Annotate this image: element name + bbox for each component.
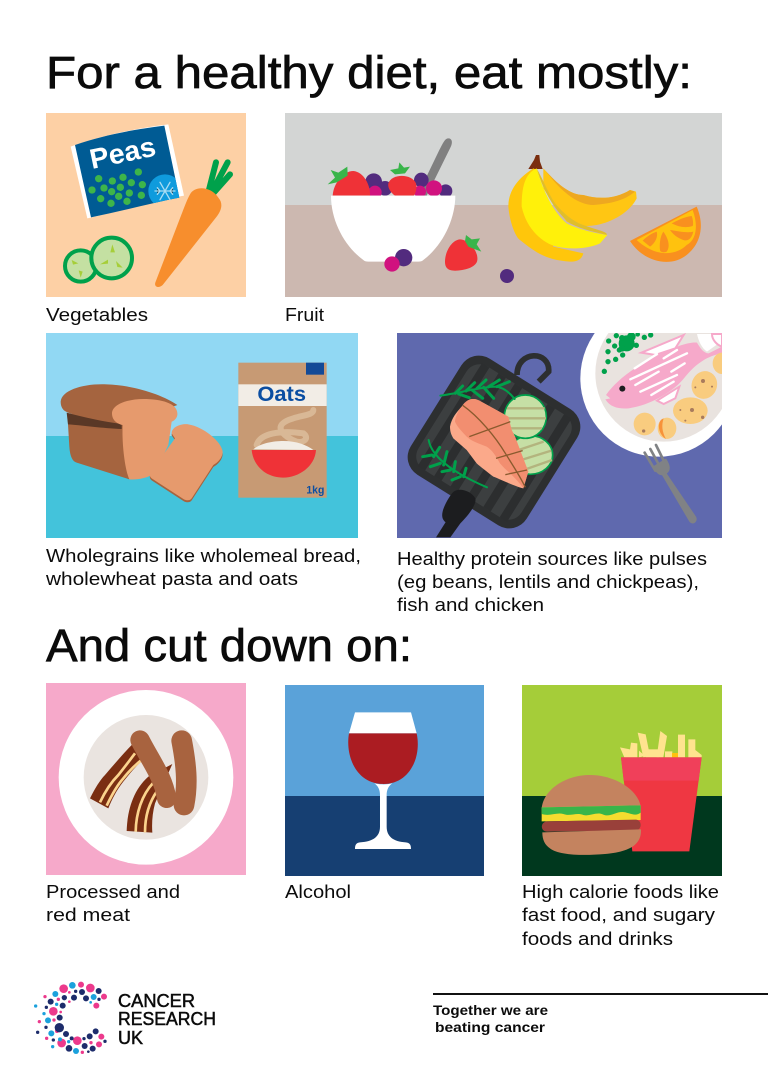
icon: carrot <box>155 162 230 287</box>
panel: high calorie foods <box>522 685 722 876</box>
panel: processed and red meat <box>46 683 246 875</box>
label: high calorie foods: foods and drinks <box>522 929 673 949</box>
icon: plate of fish and potatoes <box>580 333 722 457</box>
logo wordmark: UK <box>118 1028 143 1048</box>
icon: wine glass <box>348 712 418 849</box>
label: processed and red meat: Processed and <box>46 882 180 902</box>
panel: fruit <box>285 113 722 297</box>
icon: loaf of bread <box>61 384 223 502</box>
icon: orange slice <box>630 207 701 262</box>
icon: grilled salmon <box>450 399 528 488</box>
icon: plate <box>59 690 233 865</box>
icon: loose berries and strawberry <box>384 235 514 283</box>
label: vegetables: Vegetables <box>46 305 148 325</box>
label: healthy protein <box>397 549 707 615</box>
label: alcohol: Alcohol <box>285 882 351 902</box>
label: high calorie foods: fast food, and sugary <box>522 905 715 925</box>
heading: cut down: And cut down on: <box>46 620 412 671</box>
icon: griddle pan <box>408 353 580 538</box>
panel: alcohol <box>285 685 484 876</box>
logo wordmark <box>118 991 216 1048</box>
label: fruit: Fruit <box>285 305 324 325</box>
panel: vegetables <box>46 113 246 297</box>
logo: Cancer Research UK <box>34 982 216 1054</box>
icon: cucumber slices <box>65 238 132 282</box>
icon: fries carton <box>621 757 702 851</box>
icon: oats box: Oats <box>257 382 306 406</box>
label: processed and red meat <box>46 882 180 925</box>
label: wholegrains: wholewheat pasta and oats <box>45 569 298 589</box>
logo wordmark: CANCER <box>118 991 195 1011</box>
icon: rosemary <box>423 380 515 487</box>
icon: bananas <box>508 155 637 262</box>
icon: fries <box>620 731 702 757</box>
strapline: Together we are <box>433 1002 548 1018</box>
strapline: beating cancer <box>435 1019 546 1035</box>
label: healthy protein: Healthy protein sources like pulses <box>397 549 707 569</box>
title: For a healthy diet, eat mostly: <box>46 47 692 98</box>
icon: frozen peas bag: Peas <box>87 131 158 175</box>
label: healthy protein: fish and chicken <box>397 595 544 615</box>
label: high calorie foods <box>522 882 719 949</box>
strapline <box>433 993 768 1035</box>
icon: frozen peas bag <box>71 124 184 218</box>
label: wholegrains: Wholegrains like wholemeal bread, <box>46 546 361 566</box>
label: wholegrains <box>45 546 361 589</box>
icon: fork <box>645 445 697 523</box>
icon: oats box: 1kg <box>306 484 324 496</box>
panel: healthy protein <box>397 333 722 538</box>
icon: cucumber on griddle <box>504 395 553 474</box>
label: processed and red meat: red meat <box>46 905 130 925</box>
logo wordmark: RESEARCH <box>118 1009 216 1029</box>
label: healthy protein: (eg beans, lentils and chickpeas), <box>397 572 699 592</box>
icon: burger <box>542 775 641 855</box>
panel: wholegrains <box>46 333 358 538</box>
icon: sausages <box>140 740 186 805</box>
icon: oats box <box>238 363 327 498</box>
icon: bacon <box>90 743 172 833</box>
icon: logo dots <box>34 982 107 1054</box>
icon: fruit bowl <box>328 138 455 262</box>
label: high calorie foods: High calorie foods like <box>522 882 719 902</box>
